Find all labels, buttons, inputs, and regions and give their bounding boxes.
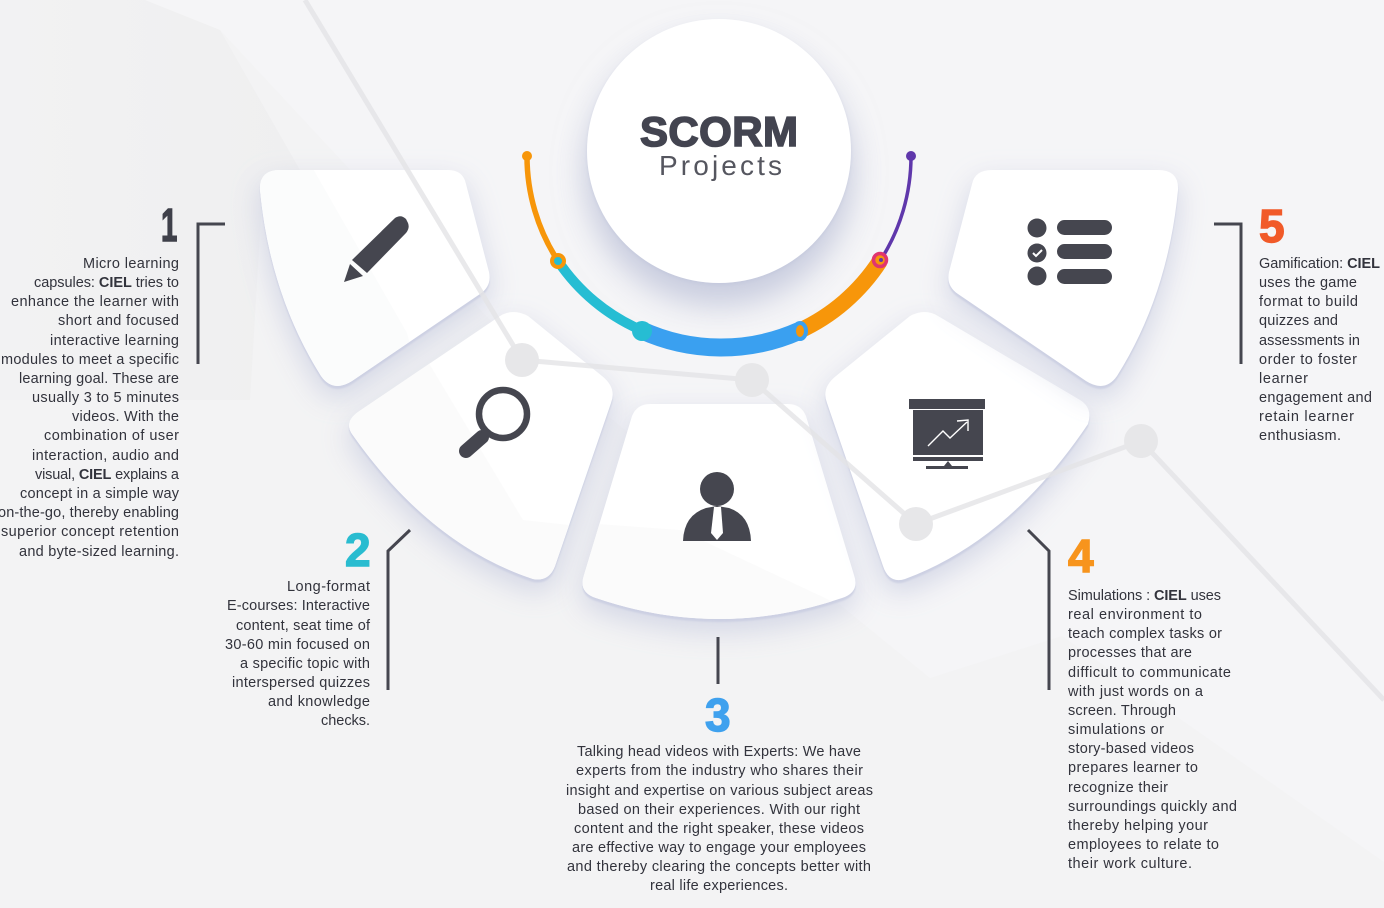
subtitle: Projects: Projects [659, 150, 782, 181]
panel: card 2 magnifier [330, 312, 615, 600]
text block 4: screen. Through [1068, 703, 1176, 719]
text block 2: and knowledge [268, 694, 370, 710]
text block 4: simulations or [1068, 722, 1164, 738]
text block 2: 30-60 min focused on [225, 637, 370, 653]
text block 1: learning goal. These are [19, 371, 179, 387]
number 5: 5 [1259, 200, 1285, 252]
text block 3: are effective way to engage your employees [572, 840, 866, 856]
text block 1: enhance the learner with [11, 294, 179, 310]
text block 4: difficult to communicate [1068, 665, 1231, 681]
text block 5: learner [1259, 371, 1308, 387]
text block 5: format to build [1259, 294, 1358, 310]
text block 4: Simulations : CIEL uses [1068, 588, 1221, 604]
text block 5: quizzes and [1259, 313, 1338, 329]
title: SCORM: SCORM [640, 108, 798, 155]
text block 2: a specific topic with [240, 656, 370, 672]
text block 5: Gamification: CIEL [1259, 256, 1380, 272]
text block 1: on-the-go, thereby enabling [0, 505, 179, 521]
text block 5 [1259, 256, 1380, 444]
text block 4 [1067, 588, 1237, 872]
network line with nodes [305, 0, 1384, 700]
panel: card 5 checklist [948, 170, 1178, 386]
text block 4: their work culture. [1068, 856, 1192, 872]
text block 1: superior concept retention [1, 524, 179, 540]
text block 5: retain learner [1259, 409, 1354, 425]
text block 5: uses the game [1259, 275, 1357, 291]
number 2: 2 [345, 524, 371, 576]
text block 4: processes that are [1068, 645, 1192, 661]
text block 2: E-courses: Interactive [227, 598, 370, 614]
text block 2: interspersed quizzes [232, 675, 370, 691]
text block 1: short and focused [58, 313, 179, 329]
connector 5 [1214, 224, 1241, 364]
icon: pencil [344, 216, 409, 282]
text block 4: surroundings quickly and [1068, 799, 1237, 815]
text block 3: insight and expertise on various subject areas [566, 783, 873, 799]
text block 2: Long-format [287, 579, 370, 595]
text block 4: story-based videos [1068, 741, 1194, 757]
text block 4: thereby helping your [1068, 818, 1208, 834]
text block 5: engagement and [1259, 390, 1372, 406]
panel: card 1 pencil [240, 160, 490, 400]
central disc [587, 19, 851, 283]
text block 4: recognize their [1068, 780, 1168, 796]
text block 1: combination of user [44, 428, 179, 444]
connector 2 [388, 530, 410, 690]
text block 5: enthusiasm. [1259, 428, 1341, 444]
icon: businessman [683, 472, 751, 541]
text block 1: capsules: CIEL tries to [34, 275, 179, 291]
text block 3: Talking head videos with Experts: We have [577, 744, 861, 760]
text block 4: teach complex tasks or [1068, 626, 1222, 642]
text block 1: visual, CIEL explains a [35, 467, 180, 483]
text block 2 [225, 579, 371, 729]
text block 1: usually 3 to 5 minutes [32, 390, 179, 406]
text block 1: modules to meet a specific [1, 352, 179, 368]
text block 1: concept in a simple way [20, 486, 180, 502]
text block 4: prepares learner to [1068, 760, 1198, 776]
panel: card 4 presentation [825, 312, 1089, 580]
text block 1: and byte-sized learning. [19, 544, 179, 560]
arc: coloured segments [522, 151, 916, 348]
connector 3 [716, 637, 720, 684]
connector 1 [198, 224, 225, 364]
text block 3: experts from the industry who shares their [576, 763, 863, 779]
text block 3: real life experiences. [650, 878, 788, 894]
text block 5: assessments in [1259, 333, 1360, 349]
text block 4: real environment to [1068, 607, 1202, 623]
panel: card 3 person [570, 404, 856, 630]
connector 4 [1028, 530, 1049, 690]
text block 1: videos. With the [72, 409, 179, 425]
text block 1: Micro learning [83, 256, 179, 272]
text block 5: order to foster [1259, 352, 1357, 368]
text block 4: employees to relate to [1068, 837, 1219, 853]
text block 3: content and the right speaker, these videos [574, 821, 864, 837]
icon: checklist [1028, 218, 1112, 286]
text block 4: with just words on a [1067, 684, 1204, 700]
number 4: 4 [1068, 530, 1094, 582]
text block 2: checks. [321, 713, 370, 729]
text block 1: interaction, audio and [32, 448, 179, 464]
text block 2: content, seat time of [236, 618, 371, 634]
text block 3: and thereby clearing the concepts better with [567, 859, 871, 875]
text block 3 [566, 744, 873, 894]
text block 3: based on their experiences. With our right [578, 802, 860, 818]
text block 1 [0, 256, 180, 560]
text block 1: interactive learning [50, 333, 179, 349]
number 3: 3 [705, 689, 731, 741]
icon: magnifying glass [466, 390, 527, 451]
number 1: 1 [161, 201, 177, 252]
icon: presentation chart [909, 399, 985, 469]
